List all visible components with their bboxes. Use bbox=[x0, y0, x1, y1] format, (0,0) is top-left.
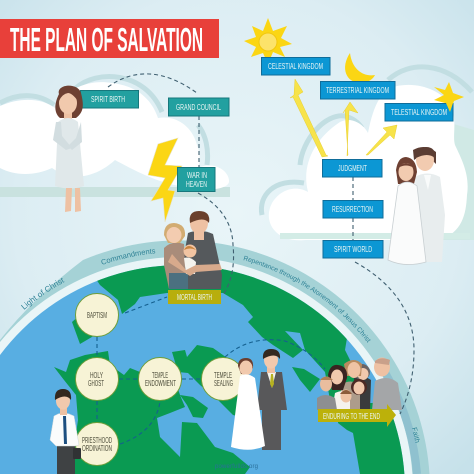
arched path band bbox=[0, 240, 430, 474]
label: Grand Council bbox=[168, 98, 229, 116]
person: woman in white, spirit birth bbox=[53, 86, 84, 212]
label: Grand Council: GRAND COUNCIL bbox=[176, 103, 221, 112]
person: young family, mortal birth bbox=[164, 211, 222, 289]
circle: Holy Ghost: HOLY bbox=[90, 371, 103, 380]
connector: earth life dashed path bbox=[97, 297, 325, 444]
circle: Temple Sealing bbox=[202, 358, 244, 400]
lightning bolt bbox=[148, 138, 182, 222]
label: Resurrection bbox=[323, 200, 383, 218]
left cloud bbox=[0, 77, 230, 197]
star tip over label bbox=[446, 103, 453, 112]
circle: Holy Ghost bbox=[76, 358, 118, 400]
star bbox=[434, 82, 464, 112]
connector: kingdoms dashed path bbox=[353, 177, 414, 414]
label: Telestial Kingdom bbox=[385, 104, 453, 121]
label: Resurrection: RESURRECTION bbox=[332, 205, 373, 214]
circle: Temple Sealing: SEALING bbox=[214, 379, 233, 388]
label: Telestial Kingdom: TELESTIAL KINGDOM bbox=[391, 108, 447, 117]
label: Terrestrial Kingdom: TERRESTRIAL KINGDOM bbox=[326, 86, 389, 95]
title banner bbox=[0, 19, 219, 58]
label: Celestial Kingdom: CELESTIAL KINGDOM bbox=[268, 62, 323, 71]
globe bbox=[0, 266, 404, 474]
label: War in Heaven bbox=[178, 168, 215, 192]
path label: Faith: Faith bbox=[412, 427, 420, 443]
label: Spirit World: SPIRIT WORLD bbox=[334, 245, 372, 254]
circle: Temple Endowment bbox=[138, 358, 182, 400]
circle: Priesthood Ordination: ORDINATION bbox=[82, 444, 112, 453]
label: Spirit Birth bbox=[80, 90, 138, 108]
path label: Commandments: Commandments bbox=[101, 248, 156, 264]
connector: pre-earth dashed path bbox=[108, 74, 234, 295]
person: young man with briefcase bbox=[50, 389, 81, 474]
label: Enduring to the End bbox=[318, 404, 396, 427]
label: War in Heaven: HEAVEN bbox=[186, 180, 207, 189]
website credit: powerfullds.org bbox=[215, 464, 258, 470]
person: bride and groom, temple sealing bbox=[231, 349, 287, 450]
path label: Repentance: Repentance through the Atonement of Jesus Christ bbox=[244, 256, 370, 343]
path label: Light of Christ: Light of Christ bbox=[21, 278, 64, 310]
title banner: THE PLAN OF SALVATION bbox=[10, 21, 203, 58]
label: Judgment: JUDGMENT bbox=[338, 164, 367, 173]
right cloud bbox=[261, 67, 474, 240]
label: Mortal Birth: MORTAL BIRTH bbox=[177, 293, 212, 302]
circle: Holy Ghost: GHOST bbox=[88, 379, 104, 388]
circle: Priesthood Ordination: PRIESTHOOD bbox=[82, 436, 112, 445]
label: Terrestrial Kingdom bbox=[320, 82, 395, 99]
circle: Temple Sealing: TEMPLE bbox=[214, 371, 232, 380]
circle: Priesthood Ordination bbox=[76, 422, 118, 466]
circle: Temple Endowment: ENDOWMENT bbox=[145, 379, 176, 388]
label: Mortal Birth bbox=[168, 290, 221, 304]
circle: Baptism bbox=[76, 294, 118, 336]
arrows to kingdoms bbox=[290, 79, 397, 157]
label: Celestial Kingdom bbox=[262, 58, 330, 75]
person: bride and groom in white bbox=[388, 147, 445, 265]
label: Enduring to the End: ENDURING TO THE END bbox=[323, 412, 380, 421]
moon bbox=[345, 53, 375, 83]
sun bbox=[244, 18, 292, 64]
label: Spirit World bbox=[323, 240, 383, 258]
circle: Baptism: BAPTISM bbox=[87, 311, 107, 320]
label: Spirit Birth: SPIRIT BIRTH bbox=[91, 95, 125, 104]
label: War in Heaven: WAR IN bbox=[187, 171, 207, 180]
label: Judgment bbox=[322, 160, 382, 177]
person: extended family bbox=[317, 358, 402, 410]
circle: Temple Endowment: TEMPLE bbox=[152, 371, 168, 380]
